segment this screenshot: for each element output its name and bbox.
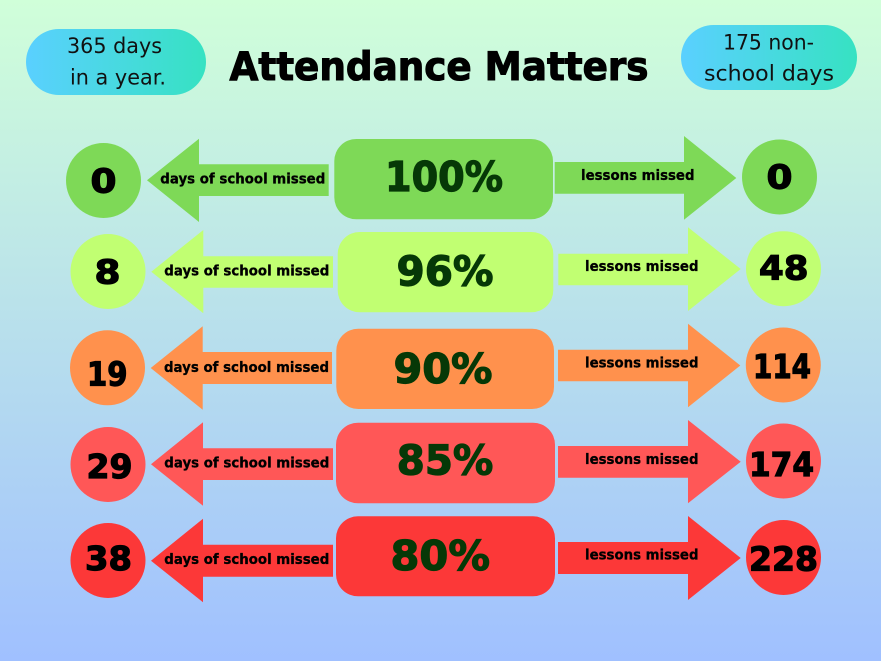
row: 96% attendance [70,227,821,313]
title: Attendance Matters [230,45,648,90]
arrow: lessons missed [558,420,741,503]
circle: 0 days missed: 0 [90,161,116,200]
arrow: days of school missed: days of school missed [164,264,329,280]
circle: 114 lessons missed: 114 [753,347,811,386]
arrow: lessons missed [555,136,736,220]
arrow: lessons missed [558,516,741,600]
arrow: days of school missed: days of school missed [164,360,329,376]
arrow: lessons missed: lessons missed [585,356,698,372]
callout: 365 days in a year: 365 days [67,34,162,58]
circle: 174 lessons missed [746,424,821,498]
arrow: days of school missed: days of school missed [164,455,329,471]
circle: 48 lessons missed [746,231,821,306]
circle: 19 days missed [70,330,145,405]
arrow: days of school missed: days of school missed [164,552,329,568]
callout: 175 non-school days [681,25,857,90]
circle: 29 days missed [70,427,146,502]
arrow: lessons missed [558,324,740,407]
arrow: days of school missed [147,139,329,222]
circle: 114 lessons missed [746,328,821,402]
panel: 80% [336,516,555,596]
panel: 100% [334,139,553,219]
callout: 365 days in a year: in a year. [70,66,166,90]
circle: 48 lessons missed: 48 [759,249,808,288]
circle: 19 days missed: 19 [87,354,128,393]
arrow: lessons missed: lessons missed [585,259,698,275]
arrow: lessons missed: lessons missed [585,452,698,468]
row: 90% attendance [70,324,821,410]
panel: 90%: 90% [394,345,492,393]
circle: 38 days missed: 38 [85,539,132,578]
circle: 0 lessons missed: 0 [766,157,792,196]
panel: 96% [338,232,553,312]
arrow: days of school missed [151,422,333,506]
panel: 85%: 85% [397,436,493,484]
circle: 228 lessons missed: 228 [749,540,818,578]
callout: 175 non-school days: school days [704,62,834,86]
row: 100% attendance [66,136,817,222]
circle: 38 days missed [70,523,146,598]
callout: 175 non-school days: 175 non- [723,30,814,54]
arrow: lessons missed: lessons missed [581,168,694,184]
panel: 96%: 96% [396,248,494,296]
circle: 8 days missed [70,234,146,309]
circle: 0 lessons missed [742,140,817,214]
arrow: lessons missed [558,227,741,311]
row: 85% attendance [70,420,821,506]
panel: 90% [336,329,554,409]
circle: 0 days missed [66,143,141,218]
arrow: days of school missed: days of school missed [160,171,325,187]
circle: 228 lessons missed [746,520,821,595]
circle: 174 lessons missed: 174 [749,445,814,484]
panel: 85% [336,423,555,503]
arrow: days of school missed [151,519,333,602]
arrow: days of school missed [151,230,333,313]
panel: 80%: 80% [390,532,490,580]
arrow: days of school missed [151,326,332,410]
circle: 29 days missed: 29 [86,447,132,486]
arrow: lessons missed: lessons missed [585,547,698,563]
panel: 100%: 100% [385,153,503,201]
callout: 365 days in a year [26,29,206,95]
row: 80% attendance [70,516,821,602]
circle: 8 days missed: 8 [94,253,120,292]
